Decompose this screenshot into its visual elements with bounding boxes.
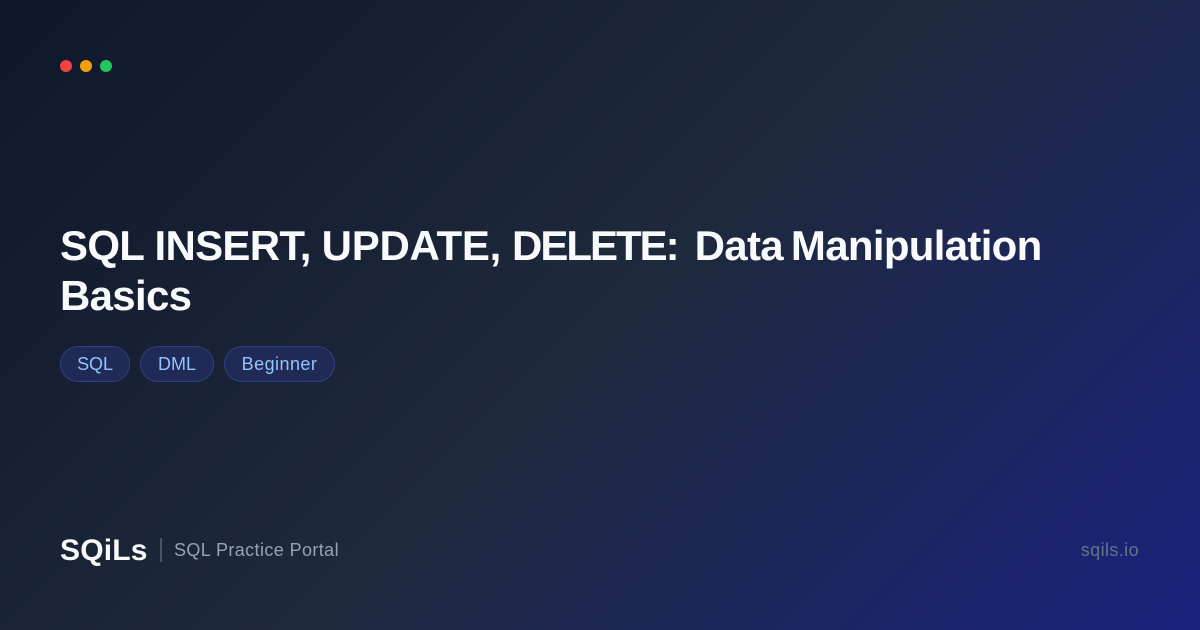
tag: Beginner <box>224 346 335 382</box>
tag: SQL <box>60 346 130 382</box>
window control dots <box>60 60 112 72</box>
tag: SQL: SQL <box>77 354 113 374</box>
title: Basics <box>60 272 191 319</box>
site url: sqils.io <box>1081 540 1139 560</box>
tag: Beginner: Beginner <box>242 354 317 374</box>
tags <box>60 346 335 382</box>
title: SQL INSERT, UPDATE, DELETE: Data Manipulation <box>60 222 1042 269</box>
brand divider <box>160 538 162 562</box>
brand logo: SQiLs <box>60 534 148 567</box>
brand tagline: SQL Practice Portal <box>174 540 339 560</box>
tag: DML: DML <box>158 354 196 374</box>
tag: DML <box>140 346 214 382</box>
title <box>60 222 1042 319</box>
